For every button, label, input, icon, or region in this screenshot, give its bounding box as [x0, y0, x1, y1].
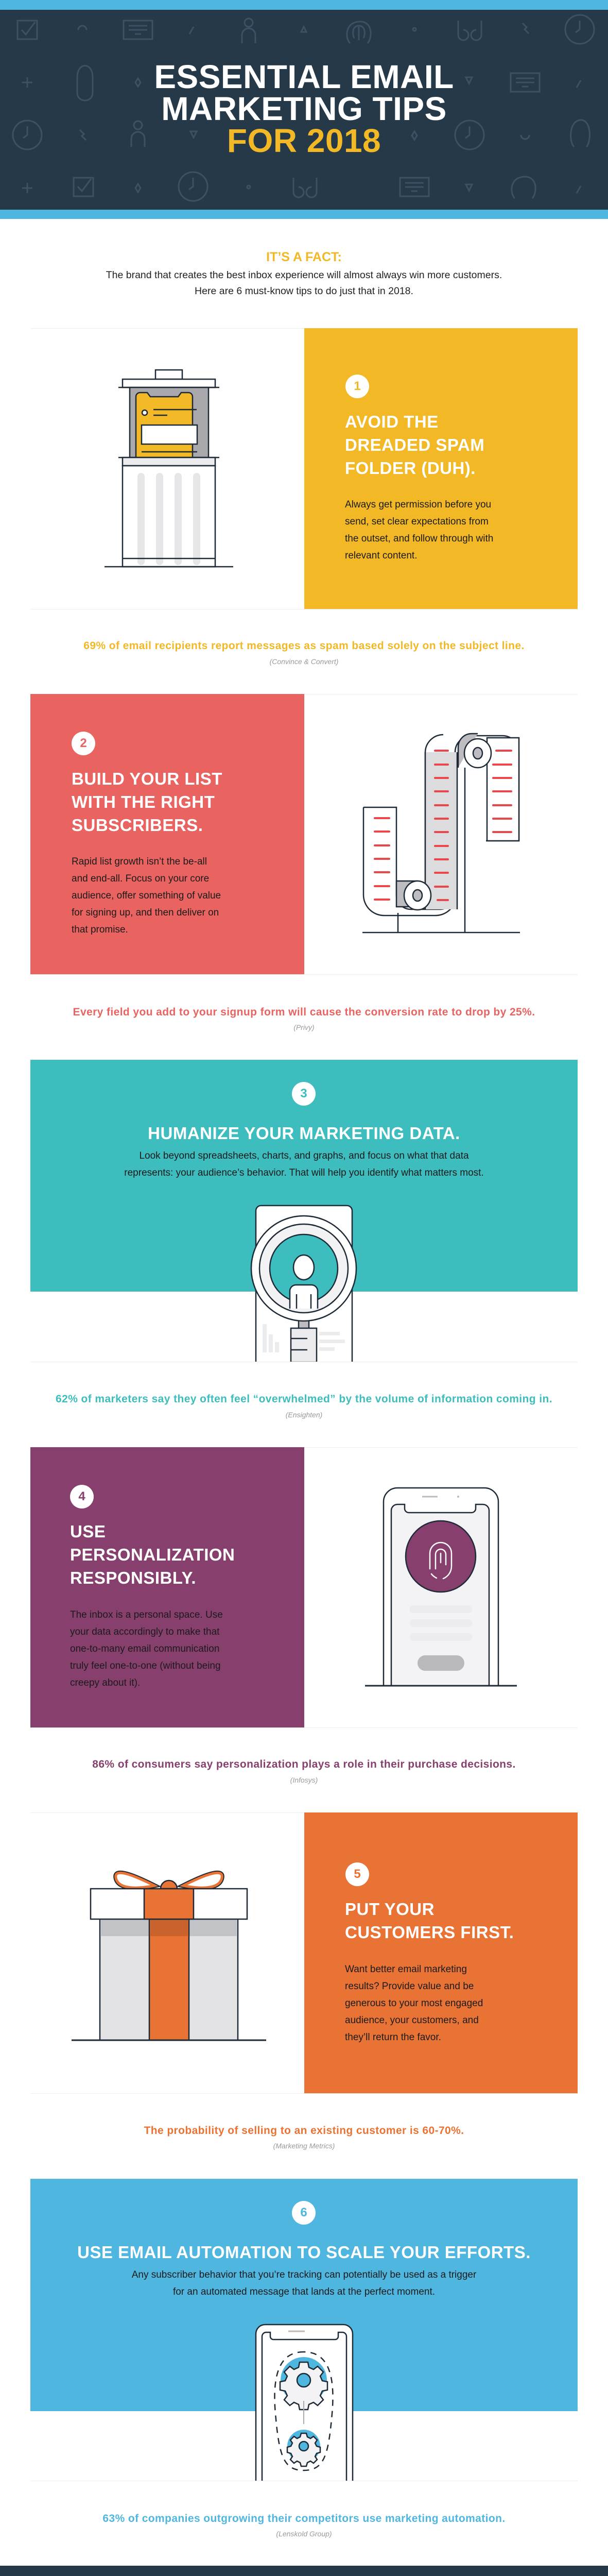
number 2	[72, 732, 95, 755]
heading 1	[345, 412, 484, 478]
stat 3: 62% of marketers say they often feel “overwhelmed” by the volume of information coming in.	[56, 1393, 552, 1405]
panel 1: spam folder	[304, 328, 578, 609]
number 1: 1	[354, 379, 361, 393]
panel 5: customers first	[304, 1812, 578, 2093]
number 3: 3	[300, 1087, 307, 1100]
header background icons	[12, 14, 595, 202]
body 5: generous to your most engaged	[345, 1998, 483, 2009]
body 4: truly feel one-to-one (without being	[70, 1660, 221, 1671]
header band	[0, 0, 608, 219]
heading 5	[345, 1900, 514, 1942]
heading 6: USE EMAIL AUTOMATION TO SCALE YOUR EFFORTS.	[77, 2243, 531, 2262]
body 6	[132, 2269, 476, 2297]
body 5: Want better email marketing	[345, 1964, 467, 1975]
body 2: that promise.	[72, 924, 128, 935]
body 2: Rapid list growth isn’t the be-all	[72, 856, 207, 867]
stat 6: 63% of companies outgrowing their competitors use marketing automation.	[102, 2513, 506, 2524]
heading 2: SUBSCRIBERS.	[72, 816, 203, 835]
number 4: 4	[78, 1489, 85, 1503]
intro: it's a fact: Here are 6 must-know tips to do just that in 2018.	[195, 285, 413, 297]
number 4	[70, 1485, 94, 1509]
icon: magnifier over person	[250, 1205, 357, 1362]
body 2	[72, 856, 221, 935]
icon: phone with gears	[255, 2324, 353, 2481]
source 6: (Lenskold Group)	[276, 2530, 332, 2538]
body 4	[70, 1609, 223, 1688]
body 1: the outset, and follow through with	[345, 533, 493, 544]
heading 2	[72, 769, 222, 835]
number 6	[292, 2201, 316, 2225]
heading 5: PUT YOUR	[345, 1900, 435, 1919]
heading 4	[70, 1522, 235, 1587]
heading 2: BUILD YOUR LIST	[72, 769, 222, 788]
heading 2: WITH THE RIGHT	[72, 792, 215, 811]
heading 5: CUSTOMERS FIRST.	[345, 1923, 514, 1942]
body 4: your data accordingly to make that	[70, 1626, 219, 1637]
body 4: creepy about it).	[70, 1677, 140, 1688]
heading 4: USE	[70, 1522, 106, 1541]
body 5: they’ll return the favor.	[345, 2032, 441, 2043]
panel 2: build your list	[30, 694, 304, 974]
title: ESSENTIAL EMAIL	[154, 58, 454, 95]
heading 1: FOLDER (DUH).	[345, 459, 476, 478]
body 1: relevant content.	[345, 550, 417, 561]
stat 4: 86% of consumers say personalization plays a role in their purchase decisions.	[92, 1758, 516, 1770]
body 2: audience, offer something of value	[72, 890, 221, 901]
heading 4: RESPONSIBLY.	[70, 1568, 196, 1587]
body 3: Look beyond spreadsheets, charts, and graphs, and focus on what that data	[139, 1150, 469, 1161]
icon: paper roll list	[362, 733, 520, 934]
intro: it's a fact	[106, 250, 502, 297]
body 4: one-to-many email communication	[70, 1643, 219, 1654]
intro: it's a fact: The brand that creates the best inbox experience will almost always win more customers.	[106, 269, 502, 281]
source 3: (Ensighten)	[286, 1411, 322, 1419]
panel 6: automation	[30, 2179, 578, 2411]
source 5: (Marketing Metrics)	[273, 2142, 335, 2150]
stat 5: The probability of selling to an existing customer is 60-70%.	[144, 2125, 464, 2137]
body 3: represents: your audience’s behavior. That will help you identify what matters most.	[124, 1167, 484, 1178]
body 3	[124, 1150, 484, 1178]
title: FOR 2018	[227, 122, 381, 159]
icon: trash can with phone	[105, 369, 233, 568]
body 6: Any subscriber behavior that you’re tracking can potentially be used as a trigger	[132, 2269, 476, 2280]
panel 4: personalization	[30, 1447, 304, 1727]
intro: it's a fact: IT’S A FACT:	[266, 250, 342, 264]
number 5	[345, 1862, 369, 1886]
body 1: send, set clear expectations from	[345, 516, 489, 527]
number 2: 2	[80, 736, 87, 750]
heading 4: PERSONALIZATION	[70, 1545, 235, 1564]
panel 3: humanize data	[30, 1060, 578, 1292]
source 4: (Infosys)	[290, 1776, 318, 1784]
body 6: for an automated message that lands at the perfect moment.	[173, 2286, 435, 2297]
icon: gift box	[72, 1870, 266, 2041]
body 2: and end-all. Focus on your core	[72, 873, 209, 884]
body 2: for signing up, and then deliver on	[72, 907, 219, 918]
stat 2: Every field you add to your signup form will cause the conversion rate to drop by 25%.	[73, 1006, 535, 1018]
number 1	[345, 375, 369, 398]
heading 1: AVOID THE	[345, 412, 439, 431]
source 1: (Convince & Convert)	[270, 657, 338, 666]
footer background icons	[0, 2566, 608, 2576]
body 5: audience, your customers, and	[345, 2015, 479, 2026]
heading 3: HUMANIZE YOUR MARKETING DATA.	[148, 1124, 460, 1143]
body 4: The inbox is a personal space. Use	[70, 1609, 223, 1620]
body 5: results? Provide value and be	[345, 1981, 474, 1992]
number 6: 6	[300, 2206, 307, 2219]
heading 1: DREADED SPAM	[345, 435, 484, 454]
title	[154, 58, 454, 159]
stat 1: 69% of email recipients report messages as spam based solely on the subject line.	[83, 640, 525, 652]
body 1: Always get permission before you	[345, 499, 491, 510]
body 5	[345, 1964, 483, 2043]
number 5: 5	[354, 1867, 361, 1881]
icon: phone with fingerprint	[365, 1487, 517, 1687]
footer: call to action	[0, 2566, 608, 2576]
header dark panel	[0, 10, 608, 210]
source 2: (Privy)	[293, 1023, 315, 1031]
body 1	[345, 499, 493, 561]
title: MARKETING TIPS	[161, 90, 447, 127]
number 3	[292, 1082, 316, 1106]
